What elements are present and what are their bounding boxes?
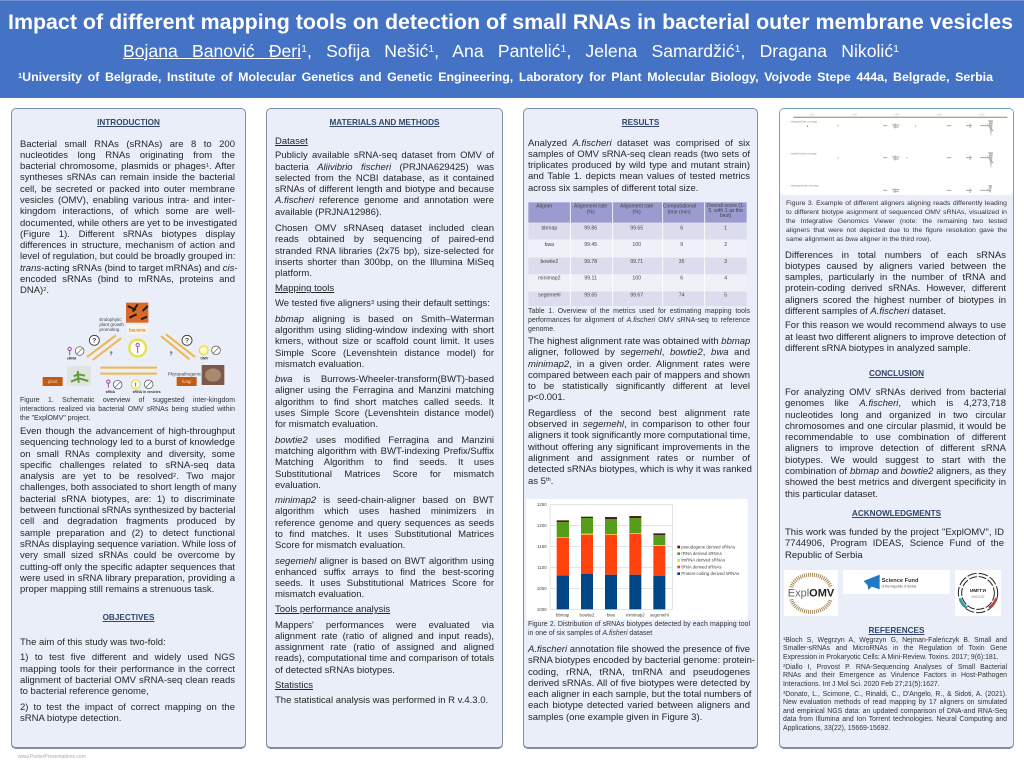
legend xyxy=(677,544,739,576)
text: introduction paragraph 1: differences in structure, mechanism of action and xyxy=(20,240,235,251)
question marks: ? xyxy=(109,352,113,358)
y axis labels: 1200 xyxy=(537,523,547,528)
text: dataset: seeds. It uses Substitutional Matrices Score for xyxy=(275,578,494,589)
text: introduction paragraph 2: proper mapping still remains a strenuous task. xyxy=(20,584,214,595)
text: dataset: mismatch evaluation. xyxy=(275,589,364,600)
track 1: bbmapped.bam coverage xyxy=(791,120,818,123)
affiliation: 1University of Belgrade, Institute of Molecular Genetics and Genetic Engineering, Laboratory for Plant Molecular Biology, Vojvode Stepe 444a, Belgrade, Serbia xyxy=(18,70,993,84)
text: conclusion: showed the best metrics and divergent specificity in xyxy=(785,477,1006,488)
text: dataset: Publicly available sRNA-seq dataset from OMV of xyxy=(275,150,494,161)
text: annotation results: samples (one example given in Figure 3). xyxy=(528,712,702,723)
text: dataset: bowtie2 uses modified Ferragina and Manzini xyxy=(275,435,494,446)
y axis labels: 1150 xyxy=(537,544,547,549)
text: acknowledgments: Republic of Serbia xyxy=(785,550,863,561)
text: dataset: segemehl aligner is based on BWT algorithm using xyxy=(275,556,494,567)
caption: figure 1: the "ExplOMV" project. xyxy=(20,415,90,422)
question marks: ? xyxy=(169,352,173,358)
legend: pseudogene derived sRNAs xyxy=(681,544,735,549)
table row: bowtie2: 99.71 xyxy=(630,259,643,265)
bar: minimap2 xyxy=(629,516,641,609)
text: alignment rate results: without offering any significant improvements in the xyxy=(528,442,750,453)
text: dataset: mismatch evaluation. xyxy=(275,359,364,370)
text: dataset: algorithm to find short matches called seeds. It xyxy=(275,397,494,408)
text: alignment rate results: aligners it took significantly more computational time, xyxy=(528,430,750,441)
track 1 xyxy=(791,120,997,137)
text: dataset: inserts shorter than 300bp, on the Illumina MiSeq xyxy=(275,257,494,268)
logo: ExplOMV: ExplOMV xyxy=(788,588,835,600)
text: alignment rate results: detected sRNAs biotypes, which is why it was ranked xyxy=(528,464,752,475)
text: dataset: for mismatch evaluation. xyxy=(275,419,378,430)
caption: table 1: genome. xyxy=(528,326,555,333)
text: results intro: and Table 1. depicts mean values of tested metrics xyxy=(528,171,750,182)
heading: acknowledgments: ACKNOWLEDGMENTS xyxy=(852,509,941,518)
text: objectives: mapping tools for their performance in the correct xyxy=(20,664,235,675)
text: introduction paragraph 1: DNA)2. xyxy=(20,285,49,296)
text: objectives: 1) to test five different and widely used NGS xyxy=(20,652,235,663)
y axis labels: 1100 xyxy=(537,565,547,570)
heading: objectives: OBJECTIVES xyxy=(103,613,154,622)
bar: bowtie2 xyxy=(581,517,593,609)
table header row: Computational xyxy=(663,204,696,210)
bacteria image xyxy=(126,303,148,334)
figure 3: genome viewer tracks xyxy=(780,109,1013,195)
track 2 xyxy=(791,152,997,169)
text: dataset: platform. xyxy=(275,268,312,279)
table row: segemehl: 5 xyxy=(724,293,727,299)
text: dataset xyxy=(274,136,494,706)
text: dataset: minimap2 is seed-chain-aligner based on BWT xyxy=(275,495,494,506)
plant xyxy=(43,366,91,386)
genome ruler xyxy=(793,114,1007,118)
column gaps xyxy=(570,202,705,306)
table row: bowtie2: 3 xyxy=(724,259,727,265)
text: references: data from Illumina and Ion Torrent technologies. Neural Computing and xyxy=(783,716,1007,723)
text: dataset: Dataset xyxy=(275,136,308,147)
table header row: best) xyxy=(720,213,732,219)
text: dataset: Mapping tools xyxy=(275,283,334,294)
text: dataset: uses Simple Score (Levenshtein distance model) xyxy=(275,408,494,419)
text: introduction paragraph 1: syntheses sRNAs can remain inside the bacterial xyxy=(20,172,235,183)
table row: bowtie2 xyxy=(528,258,747,274)
caption: figure 2: Figure 2. Distribution of sRNAs biotypes detected by each mapping tool xyxy=(528,621,750,628)
text: annotation results: derived sRNAs. All of five biotypes were detected by xyxy=(528,678,750,689)
x axis labels xyxy=(556,613,669,618)
table row: minimap2 xyxy=(528,275,747,291)
panel: results xyxy=(523,108,758,749)
y axis labels: 1050 xyxy=(537,586,547,591)
left sRNA icon xyxy=(67,347,84,361)
text: dataset: bwa is Burrows-Wheeler-transform(BWT)-based xyxy=(275,374,494,385)
text: acknowledgments: This work was funded by the project "ExplOMV", ID xyxy=(785,527,1004,538)
table header row: (%) xyxy=(587,209,595,215)
caption: figure 1: interactions realized via bacterial OMV sRNAs being studied within xyxy=(20,406,235,413)
track 3 xyxy=(791,185,997,193)
text: introduction paragraph 1: Bacterial small RNAs (sRNAs) are 8 to 200 xyxy=(20,138,235,150)
text: annotation results xyxy=(528,644,755,723)
text: annotation results: A.fischeri annotation file showed the presence of five xyxy=(528,644,750,655)
text: alignment rate results: as 5th. xyxy=(528,476,553,487)
legend: rRNA derived sRNAs xyxy=(681,551,722,556)
text: conclusion xyxy=(785,387,1006,500)
text: dataset: Mappers' performances were evaluated via xyxy=(275,620,494,631)
table row: bowtie2: 99.78 xyxy=(584,259,597,265)
heading: results: RESULTS xyxy=(622,118,659,127)
x axis labels: bbmap xyxy=(556,613,570,618)
table row: bowtie2: 35 xyxy=(679,259,685,265)
text: differences between aligners: different sRNA biotypes in analyzed sample. xyxy=(785,343,971,354)
table row: bbmap: 6 xyxy=(680,226,683,232)
text: dataset: assignment rate (ratio of assigned and aligned xyxy=(275,642,494,653)
table row: bbmap: 99.65 xyxy=(630,226,643,232)
y axis labels: 1000 xyxy=(537,607,547,612)
table header row: Aligner xyxy=(536,204,553,210)
text: conclusion: nucleotides long and organized in two circular xyxy=(785,410,1006,421)
genome ruler: 4,000 xyxy=(936,114,943,116)
text: differences between aligners: Differences in total numbers of each sRNAs xyxy=(785,250,1006,260)
text: annotation results: each aligner in each sample, but the total numbers of xyxy=(528,689,751,700)
text: dataset: bbmap aligning is based on Smith–Waterman xyxy=(275,314,494,325)
panel: materials and methods xyxy=(266,108,503,749)
x axis labels: segemehl xyxy=(650,613,669,618)
text: introduction paragraph 2: sequencing technology led to a burst of knowledge xyxy=(20,437,235,448)
table row: segemehl xyxy=(528,292,747,306)
text: dataset: Score for mismatch evaluation. xyxy=(275,540,405,551)
text: differences between aligners: samples, particularly in the number of tRNA and xyxy=(785,272,1006,283)
text: dataset: reads), computational time and comparison of totals xyxy=(275,653,494,664)
table header row: Alignment rate xyxy=(620,204,653,210)
text: introduction paragraph 2: specific challenges related to sRNA-seq data xyxy=(20,460,235,471)
title: Impact of different mapping tools on detection of small RNAs in bacterial outer membrane vesicles xyxy=(8,10,1013,34)
track 2: bowtie2ed.bam coverage xyxy=(791,152,817,155)
caption: figure 3: aligners that were not depicted due to the figure resolution gave the xyxy=(786,227,1007,234)
text: introduction paragraph 2: sRNAs displaying sequence variation. While loss of xyxy=(20,539,236,550)
text: conclusion: For analyzing OMV sRNAs derived from bacterial xyxy=(785,387,1006,398)
genome ruler: 2,000 xyxy=(851,114,858,116)
text: introduction paragraph 2: bacterial sRNA biotypes, are: 1) to discriminate xyxy=(20,494,235,505)
genome ruler: 5,000 xyxy=(979,114,985,116)
text: objectives: sRNA biotype detection. xyxy=(20,713,121,724)
text: references: 1Bloch S, Węgrzyn A, Węgrzyn G, Nejman-Faleńczyk B. Small and xyxy=(783,636,1007,644)
endophytic label: plant growth xyxy=(99,322,124,327)
text: alignment rate results: compared between each pair of mappers and shown xyxy=(528,370,750,381)
table row: bwa: 99.45 xyxy=(584,242,597,248)
question marks: ? xyxy=(185,338,189,345)
text: alignment rate results: to be statistically significantly different at level xyxy=(528,381,750,392)
interaction arrows xyxy=(87,334,195,374)
text: introduction paragraph 2: cutting-off only the specific adapter sequences that xyxy=(20,562,235,573)
text: conclusion: aligners to improve detection of different sRNA xyxy=(785,443,1006,454)
legend: Protein-coding derived sRNAs xyxy=(681,571,739,576)
text: introduction paragraph 2: cell and degradation fragments produced by xyxy=(20,516,235,527)
text: references: 3Donato, L., Scimone, C., Rinaldi, C., D'Angelo, R., & Sidoti, A. (2021). xyxy=(783,690,1007,698)
caption: figure 2: in one of six samples of A.fisheri dataset xyxy=(528,630,652,637)
text: annotation results: sRNA biotypes encoded by bacterial genome: protein- xyxy=(528,655,755,666)
text: dataset: Matching Algorithm to find seeds. It uses xyxy=(275,457,494,468)
left sRNA icon: sRNA xyxy=(67,357,77,361)
text: objectives xyxy=(20,636,235,724)
fungi: Phytopathogenic xyxy=(168,372,202,377)
text: differences between aligners xyxy=(785,250,1006,354)
caption: table 1 xyxy=(528,308,750,333)
text: objectives: 2) to test the impact of correct mapping on the xyxy=(20,702,235,713)
heading: materials and methods: MATERIALS AND METHODS xyxy=(329,118,440,127)
text: dataset: available (PRJNA12986). xyxy=(275,207,382,218)
text: introduction paragraph 1: trans-acting sRNAs (bind to target mRNAs) and cis- xyxy=(20,263,238,274)
text: introduction paragraph 2 xyxy=(20,426,237,595)
caption: figure 3 xyxy=(786,200,1007,243)
panel: introduction and objectives xyxy=(11,108,246,749)
text: results intro: Analyzed A.fischeri dataset was comprised of six xyxy=(528,138,750,148)
text: introduction paragraph 1: bacterial chromosome, plasmids or phages1. After xyxy=(20,161,235,172)
legend: tRNA derived sRNAs xyxy=(681,564,722,569)
text: alignment rate results: The highest alignment rate was obtained with bbmap xyxy=(528,336,750,347)
text: introduction paragraph 2: Even though the advancement of high-throughput xyxy=(20,426,235,437)
text: conclusion: genomes like A.fischeri, which is 4,273,718 xyxy=(785,398,1006,409)
logo: ExplOMV xyxy=(784,570,838,616)
table row: minimap2: 100 xyxy=(632,276,641,282)
text: introduction paragraph 1: documented, while others are yet to be investigated xyxy=(20,218,237,229)
text: references: and empirical NGS data: an updated comparison of DNA-and RNA-Seq xyxy=(783,708,1007,715)
logo: IMGGE: IMGGE xyxy=(971,594,985,599)
caption: figure 3: Figure 3. Example of different aligners aligning reads differently leading xyxy=(786,200,1007,207)
central vesicle with sRNA xyxy=(129,340,146,356)
table row: minimap2: minimap2 xyxy=(538,276,561,282)
text: alignment rate results xyxy=(528,336,752,487)
table header row xyxy=(528,202,747,223)
text: references xyxy=(783,636,1007,732)
text: dataset: A.fischeri reference genome and annotation were xyxy=(275,195,494,206)
text: references: Expression in Prokaryotic Cells: A Mini-Review. Toxins. 2017; 9(6):181. xyxy=(783,654,998,661)
text: introduction paragraph 1 xyxy=(20,138,238,296)
x axis labels: bwa xyxy=(607,613,616,618)
y axis labels: 1250 xyxy=(537,502,547,507)
x axis labels: bowtie2 xyxy=(580,613,595,618)
text: references: RNAs and their Emergence as Virulence Factors in Host-Pathogen xyxy=(783,672,1007,679)
table row: segemehl: 74 xyxy=(679,293,685,299)
table header row: Overall score (1- xyxy=(707,203,745,209)
table 1: aligner metrics xyxy=(528,202,747,306)
bottom legend icons: sRNA xyxy=(106,390,116,394)
table header row: Alignment rate xyxy=(574,204,607,210)
text: references: Smaller-sRNAs and MicroRNAs in the Regulation of Toxin Gene xyxy=(783,645,1007,652)
caption: table 1: performances for alignment of A.fischeri OMV sRNA-seq to reference xyxy=(528,317,750,324)
fungi: fungi xyxy=(182,379,191,384)
bar: bwa xyxy=(605,517,617,609)
text: dataset: reference genome and query sequences as seeds xyxy=(275,518,494,529)
text: dataset: Simple Score (Levenshtein distance model) for xyxy=(275,348,494,359)
endophytic label: Endophytic xyxy=(99,317,122,322)
text: dataset: The statistical analysis was performed in R v.4.3.0. xyxy=(275,695,488,706)
right OMV icon: OMV xyxy=(200,357,209,361)
text: dataset: algorithm which uses hashed minimizers in xyxy=(275,506,494,517)
logo: Science Fund: Science Fund xyxy=(882,578,919,584)
text: acknowledgments: 7744906, Program IDEAS, Science Fund of the xyxy=(785,538,1004,549)
text: annotation results: each biotype detected varied between aligners and xyxy=(528,700,750,711)
caption: figure 3: same alignment as bwa aligner in the third row). xyxy=(786,236,931,243)
table row: bbmap: 99.86 xyxy=(584,226,597,232)
text: dataset: stranded RNA libraries (2x75 bp), size-selected for xyxy=(275,246,494,257)
table row: minimap2: 6 xyxy=(680,276,683,282)
text: differences between aligners: biotypes caused by aligners varied between the xyxy=(785,261,1006,272)
caption: table 1: Table 1. Overview of the metrics used for estimating mapping tools xyxy=(528,308,750,315)
endophytic label: promoting xyxy=(99,327,120,332)
table row: bowtie2: bowtie2 xyxy=(540,259,558,265)
text: dataset: bacteria Aliivibrio fischeri (PRJNA629425) was xyxy=(275,162,494,173)
caption: figure 1: Figure 1. Schematic overview of suggested inter-kingdom xyxy=(20,397,235,404)
genome ruler: 1,000 xyxy=(809,114,815,116)
genome ruler: 3,000 xyxy=(894,114,900,116)
table row: minimap2: 99.11 xyxy=(584,276,597,282)
text: differences between aligners: protein-coding derived sRNAs. However, different xyxy=(785,283,1006,294)
text: introduction paragraph 1: (Figure 1). Different sRNAs biotypes display xyxy=(20,229,235,240)
text: introduction paragraph 2: were used in sRNA library preparation, providing a xyxy=(20,573,235,584)
text: alignment rate results: observed in segemehl, in comparison to other four xyxy=(528,419,750,430)
bottom legend icons: sRNA in vesicles xyxy=(133,390,161,394)
panel: figure 3, conclusion, acknowledgments, references xyxy=(779,108,1014,749)
text: introduction paragraph 1: nucleotides long RNAs originating from the xyxy=(20,150,235,161)
table row: segemehl: 99.67 xyxy=(630,293,643,299)
text: dataset: Substitutional Matrices Score for mismatch xyxy=(275,469,494,480)
text: dataset: of detected sRNAs biotypes. xyxy=(275,665,395,676)
legend: tmRNA derived sRNAs xyxy=(681,558,725,563)
table row: bwa: 100 xyxy=(632,242,641,248)
text: introduction paragraph 1: vesicles (OMV), enabling various intra- and inter- xyxy=(20,195,235,206)
logo: Science Fund: of the Republic of Serbia xyxy=(882,585,916,589)
table row: bbmap: bbmap xyxy=(541,226,557,232)
heading: conclusion: CONCLUSION xyxy=(869,369,924,378)
text: differences between aligners: For this reason we would recommend always to use xyxy=(785,320,1006,331)
text: dataset: kmers, without size or scaffold count limit. It uses xyxy=(275,336,494,347)
bacteria image: bacteria xyxy=(129,327,146,332)
text: alignment rate results: alignment and assignment rates or number of xyxy=(528,453,750,464)
header banner xyxy=(0,0,1024,98)
text: dataset: aligner using the Ferragina and Manzini matching xyxy=(275,385,494,396)
logo: Science Fund xyxy=(843,570,950,594)
caption: figure 1 xyxy=(20,396,235,422)
text: introduction paragraph 1: level of regulation, but could be broadly grouped in: xyxy=(20,251,235,262)
logo: IMGGE: ИМГГИ xyxy=(970,588,987,593)
table row: segemehl: segemehl xyxy=(538,293,561,299)
text: differences between aligners: different samples of A.fischeri dataset. xyxy=(785,306,946,317)
text: dataset: We tested five aligners3 using their default settings: xyxy=(275,298,490,309)
chart: figure 2 stacked bars xyxy=(526,499,748,620)
heading: references: REFERENCES xyxy=(869,626,924,635)
text: differences between aligners: aligners scored the highest number of biotypes in xyxy=(785,295,1006,306)
table row: minimap2: 4 xyxy=(724,276,727,282)
text: introduction paragraph 2: sample preparation and (2) to detect functional xyxy=(20,528,235,539)
caption: figure 2 xyxy=(528,620,750,637)
text: introduction paragraph 1: kingdom interactions, of which some are well- xyxy=(20,206,235,217)
text: references: New evaluation methods of read mapping by 17 aligners on simulated xyxy=(783,699,1007,706)
text: introduction paragraph 2: on small RNAs complexity and diversity, some xyxy=(20,449,235,460)
plot frame and gridlines xyxy=(550,504,672,609)
question marks xyxy=(89,335,192,358)
text: dataset: evaluation. xyxy=(275,480,321,491)
text: dataset: to find matches. It uses Substitutional Matrices xyxy=(275,529,494,540)
text: introduction paragraph 2: very small sized sRNAs could be overcome by xyxy=(20,550,235,561)
figure 1: inter-kingdom schematic xyxy=(42,302,224,394)
text: acknowledgments xyxy=(785,527,1004,561)
fungi xyxy=(168,365,224,386)
text: dataset: Tools performance analysis xyxy=(275,604,390,615)
text: results intro: across six samples of different total size. xyxy=(528,183,698,194)
text: introduction paragraph 1: cell, be secreted or packed into outer membrane xyxy=(20,184,235,195)
text: conclusion: biotypes. We would suggest to start with the xyxy=(785,455,1006,466)
y axis labels xyxy=(537,502,547,612)
text: conclusion: chromosomes and one circular plasmid, it would be xyxy=(785,421,1006,432)
table header row: (%) xyxy=(633,209,641,215)
track 3: bwamapped.bam coverage xyxy=(791,185,819,188)
text: objectives: The aim of this study was two-fold: xyxy=(20,636,166,648)
text: conclusion: recommendable to use combination of different xyxy=(785,432,1006,443)
text: introduction paragraph 1: encoded sRNAs (bind to mRNAs, proteins and xyxy=(20,274,235,285)
text: conclusion: combination of bbmap and bowtie2 aligners, as they xyxy=(785,466,1006,477)
text: introduction paragraph 2: challenges, both associated to short length of many xyxy=(20,482,237,493)
text: alignment rate results: aligner, followed by segemehl, bowtie2, bwa and xyxy=(528,347,750,358)
text: dataset: alignment rate (ratio of aligned and input reads), xyxy=(275,631,494,642)
text: introduction paragraph 2: analysis are yet to be resolved2. Two major xyxy=(20,471,235,482)
text: results intro: triplicates produced by wild type and mutant strain) xyxy=(528,160,750,171)
text: dataset: algorithm using sliding-window indexing with short xyxy=(275,325,494,336)
text: dataset: Statistics xyxy=(275,680,313,691)
text: objectives: to bacterial reference genome, xyxy=(20,686,149,697)
text: references: 2Diallo I, Provost P. RNA-Sequencing Analyses of Small Bacterial xyxy=(783,663,1007,671)
text: dataset: sRNAs of different length and biotype and because xyxy=(275,184,494,195)
authors: Bojana Banović Đeri1, Sofija Nešić1, Ana Pantelić1, Jelena Samardžić1, Dragana Nikolić1 xyxy=(123,41,899,61)
text: dataset: Chosen OMV sRNAseq dataset included clean xyxy=(275,223,494,234)
question marks: ? xyxy=(92,338,96,345)
text: results intro: samples of OMV sRNA-seq clean reads (two sets of xyxy=(528,149,750,160)
heading: introduction: INTRODUCTION xyxy=(97,118,160,127)
text: introduction paragraph 2: between functional sRNAs synthesized by bacterial xyxy=(20,505,235,516)
text: conclusion: this particular dataset. xyxy=(785,489,878,500)
table row: bwa: 9 xyxy=(680,242,683,248)
table row: bbmap: 1 xyxy=(724,226,727,232)
bar: segemehl xyxy=(653,533,665,609)
table row: bwa: bwa xyxy=(545,242,554,248)
logo: IMGGE xyxy=(955,570,1001,616)
text: references: Interactions. Int J Mol Sci. 2020 Feb 27;21(5):1627. xyxy=(783,681,940,688)
text: results intro xyxy=(528,138,750,194)
text: alignment rate results: p<0.001. xyxy=(528,392,565,403)
table row: bwa: 2 xyxy=(724,242,727,248)
bottom legend icons xyxy=(106,380,161,394)
table header row: 5, with 1 as the xyxy=(708,208,743,214)
table row: segemehl: 99.65 xyxy=(584,293,597,299)
table header row: time (min) xyxy=(668,209,691,215)
text: alignment rate results: Regardless of the second best alignment rate xyxy=(528,408,750,419)
footer credit: www.PosterPresentations.com xyxy=(18,754,86,760)
text: dataset: reads obtained by sequencing of paired-end xyxy=(275,234,494,245)
table row: bwa xyxy=(528,240,747,257)
table row: bbmap xyxy=(528,223,747,239)
text: annotation results: coding, rRNA, tRNA, tmRNA and pseudogenes xyxy=(528,667,750,678)
text: dataset: enhanced suffix arrays to find the best-scoring xyxy=(275,567,494,578)
text: dataset: selected from the NCBI database, as it contained xyxy=(275,173,494,184)
x axis labels: minimap2 xyxy=(626,613,645,618)
text: differences between aligners: at least two different aligners to improve detection of xyxy=(785,332,1006,343)
caption: figure 3: the Integrative Genomics Viewer (note: the remaining two tested xyxy=(786,218,1007,225)
text: objectives: alignment of bacterial OMV sRNA-seq clean reads xyxy=(20,675,235,686)
text: dataset: matching algorithm with BWT-indexing Prefix/Suffix xyxy=(275,446,494,457)
text: references: Applications, 33(22), 15669-15692. xyxy=(783,725,890,732)
right OMV icon xyxy=(199,346,220,361)
caption: figure 3: to different biotype asignment of sequenced OMV sRNAs, visualized in xyxy=(786,209,1007,216)
text: alignment rate results: minimap2, in a given order. Alignment rates were xyxy=(528,359,750,370)
bar: bbmap xyxy=(557,520,569,609)
plant: plant xyxy=(48,379,58,384)
